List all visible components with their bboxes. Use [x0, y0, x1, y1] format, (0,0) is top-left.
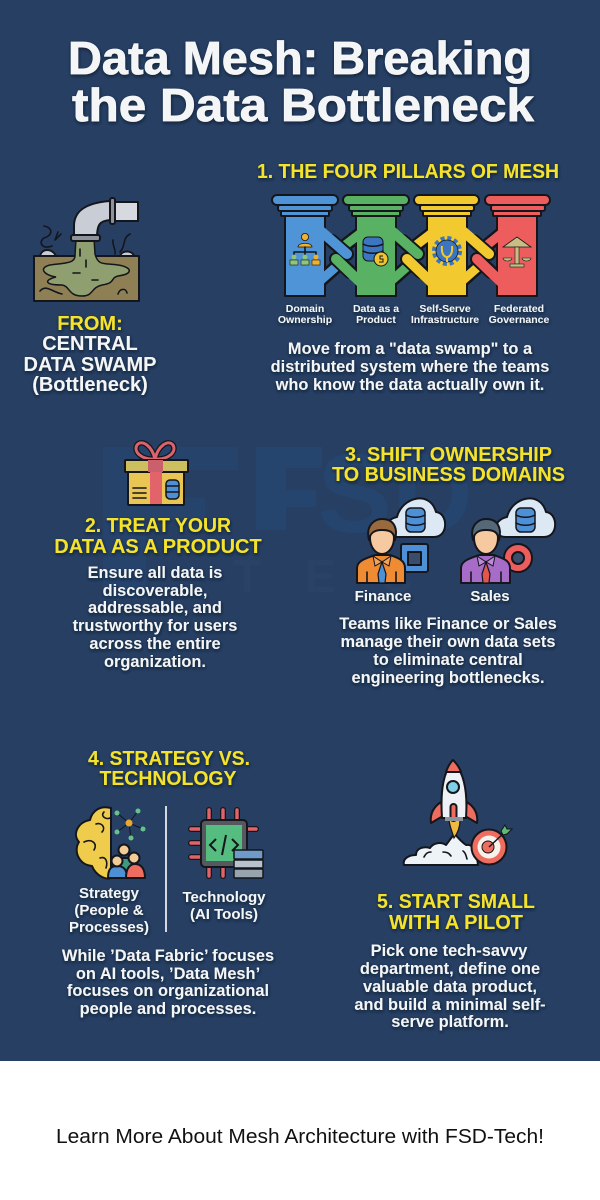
- icon: finance person: [357, 498, 445, 583]
- ownership description: [339, 615, 557, 687]
- pillar labels: Governance: [489, 314, 550, 326]
- from label: FROM:: [57, 313, 123, 335]
- pillar: federated governance: [485, 195, 550, 296]
- icon: rocket and target: [404, 760, 512, 865]
- footer text: Learn More About Mesh Architecture with FSD-Tech!: [56, 1126, 544, 1148]
- strategy description: people and processes.: [80, 1000, 256, 1018]
- strategy and technology labels: Processes): [69, 919, 149, 936]
- heading: start small: 5. START SMALL: [377, 891, 535, 913]
- domain labels: Sales: [470, 588, 510, 605]
- data product description: Ensure all data is: [88, 564, 222, 582]
- pillar labels: Infrastructure: [411, 314, 479, 326]
- strategy description: on AI tools, ’Data Mesh’: [76, 965, 260, 983]
- heading: strategy vs technology: 4. STRATEGY VS.: [88, 748, 250, 770]
- heading: shift ownership: [332, 444, 565, 486]
- divider: [165, 806, 167, 932]
- pilot description: Pick one tech-savvy: [371, 942, 528, 960]
- data product description: across the entire: [89, 635, 221, 653]
- ownership description: engineering bottlenecks.: [351, 669, 545, 687]
- pillar labels: Data as a: [353, 303, 399, 315]
- pillars description: [271, 340, 549, 394]
- strategy and technology labels: (AI Tools): [190, 906, 258, 923]
- heading: start small: [377, 891, 535, 934]
- domain labels: [355, 588, 510, 605]
- strategy and technology labels: Technology: [182, 889, 266, 906]
- pilot description: and build a minimal self-: [354, 996, 546, 1014]
- icon: chip and server: [191, 810, 263, 878]
- strategy description: While ’Data Fabric’ focuses: [62, 947, 274, 965]
- pilot description: department, define one: [360, 960, 540, 978]
- strategy and technology labels: [69, 885, 266, 936]
- icon: swamp pipe: [34, 198, 139, 301]
- ownership description: manage their own data sets: [341, 633, 555, 651]
- heading: treat your data: 2. TREAT YOUR: [85, 515, 232, 537]
- pilot description: serve platform.: [391, 1013, 509, 1031]
- watermark: SD: [317, 431, 473, 556]
- watermark: TEC: [233, 550, 457, 602]
- data product description: discoverable,: [103, 582, 207, 600]
- ownership description: Teams like Finance or Sales: [339, 615, 557, 633]
- pillars description: distributed system where the teams: [271, 358, 549, 376]
- strategy description: focuses on organizational: [67, 982, 269, 1000]
- pillar labels: Product: [356, 314, 396, 326]
- pillar labels: Self-Serve: [419, 303, 471, 315]
- pillar: domain ownership: [272, 195, 338, 296]
- heading: start small: WITH A PILOT: [389, 912, 523, 934]
- heading: treat your data: DATA AS A PRODUCT: [54, 536, 262, 558]
- domain labels: Finance: [355, 588, 411, 605]
- from label: DATA SWAMP: [24, 354, 156, 376]
- pillars chart: [272, 195, 550, 296]
- pillar: self-serve infrastructure: [414, 195, 479, 296]
- pillars description: who know the data actually own it.: [275, 376, 544, 394]
- data product description: organization.: [104, 653, 206, 671]
- icon: brain and people: [76, 807, 146, 878]
- heading: treat your data: [54, 515, 262, 558]
- heading: strategy vs technology: [88, 748, 250, 790]
- watermark: [103, 431, 473, 602]
- from label: (Bottleneck): [32, 374, 148, 396]
- from label: CENTRAL: [42, 333, 138, 355]
- data product description: addressable, and: [88, 599, 222, 617]
- title: [68, 32, 534, 131]
- strategy and technology labels: (People &: [74, 902, 144, 919]
- link outlines: [320, 233, 502, 281]
- pilot description: valuable data product,: [363, 978, 537, 996]
- data product description: trustworthy for users: [73, 617, 237, 635]
- interlocking links: [320, 232, 502, 282]
- heading: shift ownership: 3. SHIFT OWNERSHIP: [345, 444, 552, 466]
- icon: sales person: [461, 498, 555, 583]
- icon: data gift box: [125, 443, 188, 505]
- pillars description: Move from a "data swamp" to a: [288, 340, 533, 358]
- from label: [24, 313, 156, 396]
- heading: strategy vs technology: TECHNOLOGY: [100, 768, 237, 790]
- pillar labels: Federated: [494, 303, 544, 315]
- pillar labels: Ownership: [278, 314, 332, 326]
- strategy description: [62, 947, 274, 1018]
- title: the Data Bottleneck: [72, 79, 534, 131]
- pillar labels: [278, 303, 550, 326]
- ownership description: to eliminate central: [373, 651, 523, 669]
- title: Data Mesh: Breaking: [68, 32, 532, 84]
- strategy and technology labels: Strategy: [79, 885, 140, 902]
- pilot description: [354, 942, 546, 1031]
- heading: four pillars: 1. THE FOUR PILLARS OF MESH: [257, 160, 559, 183]
- heading: shift ownership: TO BUSINESS DOMAINS: [332, 464, 565, 486]
- pillar: data as a product: [343, 195, 409, 296]
- pillar labels: Domain: [286, 303, 324, 315]
- data product description: [73, 564, 237, 671]
